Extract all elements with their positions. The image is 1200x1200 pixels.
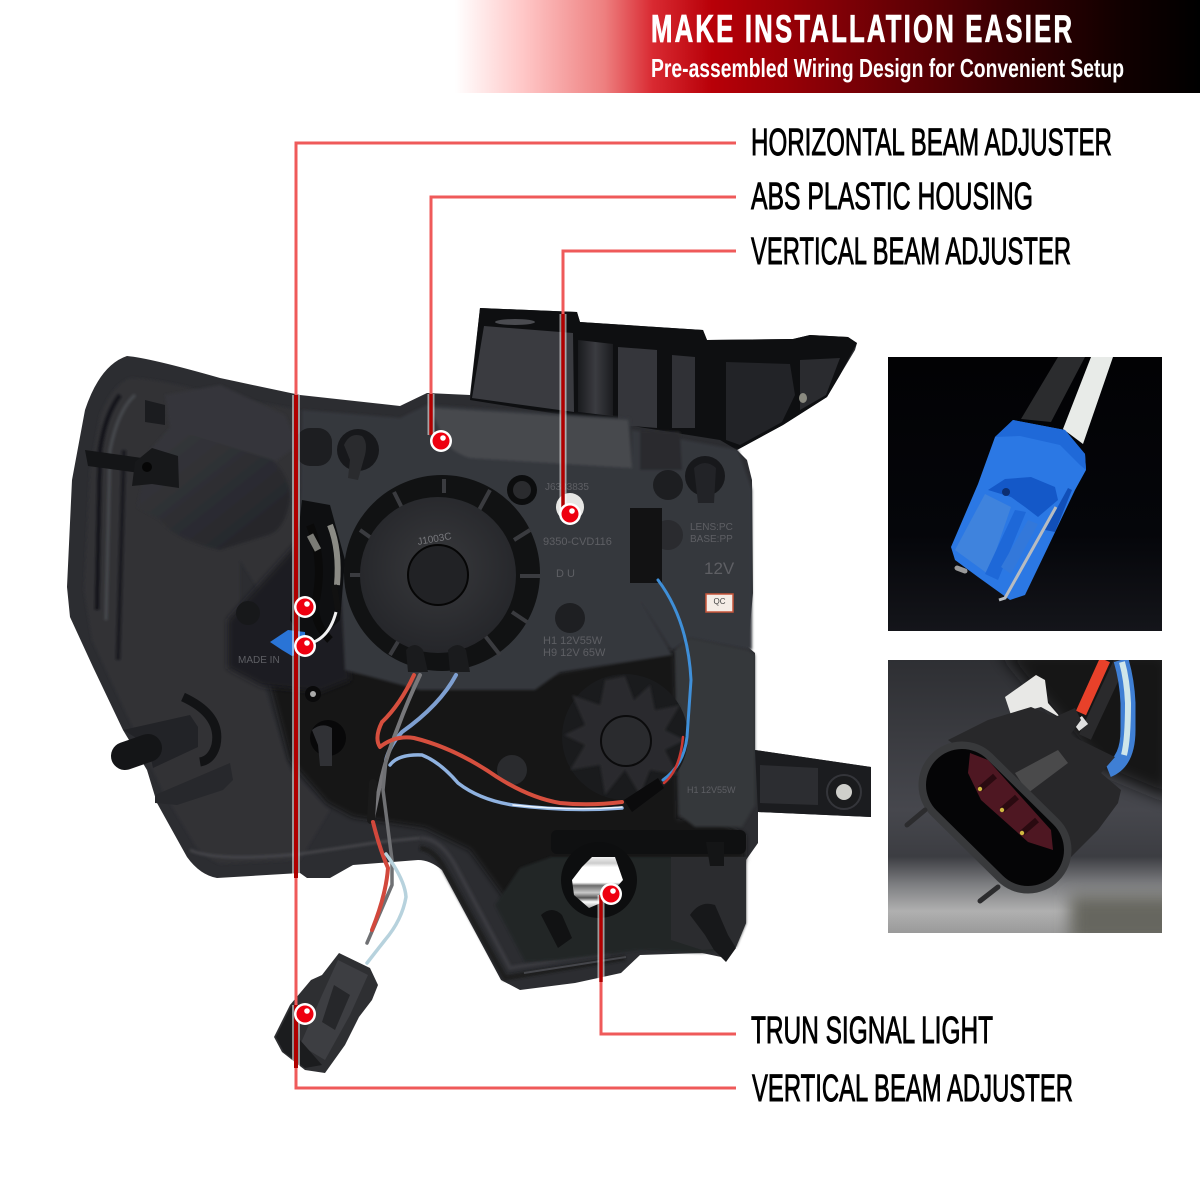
photo panel: wiring harness plug: [888, 660, 1162, 933]
callout: ABS plastic housing: [431, 176, 1033, 435]
gold pins: [978, 787, 1024, 835]
left wiring opening: [290, 500, 345, 650]
bottom harness wires: [367, 580, 691, 963]
blurred lower right backdrop: [1060, 888, 1162, 933]
adjuster screw knobs: [236, 428, 725, 785]
upper mounting bracket: [470, 308, 857, 450]
plug cavity: [962, 785, 1028, 850]
callout: horizontal beam adjuster: [292, 122, 1112, 1088]
embossed labels on housing: H1 12V55W: [687, 785, 736, 795]
left lens housing panel: [84, 378, 420, 864]
QC sticker: QC: [714, 597, 726, 606]
header banner: [455, 0, 1200, 93]
cap wire grommets: [406, 645, 470, 672]
embossed labels on housing: MADE IN: [238, 655, 280, 666]
embossed labels on housing: H1 12V55W: [543, 635, 603, 647]
maroon contact block: [968, 753, 1053, 850]
white braided wire: [1063, 357, 1113, 444]
lamp cap moulded text: J1003C: [417, 531, 452, 548]
white clip tab: [1005, 675, 1061, 718]
left wiring pocket: [228, 540, 350, 692]
callout: turn signal light: [601, 895, 993, 1052]
embossed labels on housing: LENS:PC: [690, 522, 733, 533]
lower right reflector housing: [495, 830, 746, 973]
label: TRUN SIGNAL LIGHT: [751, 1010, 993, 1052]
central grey housing: [300, 405, 752, 690]
vent nozzle left: [85, 400, 179, 488]
lower rim ridge: [420, 838, 625, 978]
harness wires: [1076, 660, 1128, 770]
right mounting ear: [755, 750, 871, 817]
large round lamp cap: [344, 475, 540, 671]
photo panel: blue bulb socket: [888, 357, 1162, 631]
wire splice connector: [624, 778, 664, 812]
banner title: MAKE INSTALLATION EASIER: [651, 8, 1072, 51]
central dark recess: [250, 650, 745, 905]
right grey block: [675, 638, 755, 827]
black braided wire: [1021, 357, 1085, 422]
lower round lamp cap: [562, 674, 688, 800]
plug oval rim: [962, 785, 1028, 850]
embossed labels on housing: 12V: [704, 559, 735, 578]
embossed labels on housing: J6383835: [545, 482, 589, 493]
small blue bulb socket: [270, 630, 306, 656]
left rounded housing bump: [137, 385, 298, 550]
black wire cover box: [630, 508, 662, 583]
lower left vent peg: [123, 697, 233, 805]
mounting pegs: [907, 810, 998, 901]
headlight body silhouette: [67, 308, 871, 990]
headlight rear view illustration: [67, 308, 871, 1073]
plug body: [948, 707, 1121, 860]
embossed labels on housing: BASE:PP: [690, 534, 733, 545]
embossed labels on housing: H9 12V 65W: [543, 647, 606, 659]
dark background blur: [1000, 650, 1172, 800]
lower right pegs: [541, 842, 736, 962]
callout: vertical beam adjuster: [563, 231, 1071, 510]
red marker dots: [294, 430, 622, 1025]
embossed labels on housing: 9350-CVD116: [543, 536, 612, 548]
embossed labels on housing: D U: [556, 568, 575, 580]
bottom plug connector: [274, 953, 378, 1073]
turn signal chrome reflector: [561, 842, 637, 918]
label: ABS PLASTIC HOUSING: [751, 176, 1033, 218]
vertical adjuster white screw: [556, 493, 584, 521]
QC sticker: [706, 594, 733, 612]
contact bars: [980, 776, 1037, 833]
embossed labels on housing: [238, 482, 736, 795]
blue socket: [951, 420, 1086, 600]
